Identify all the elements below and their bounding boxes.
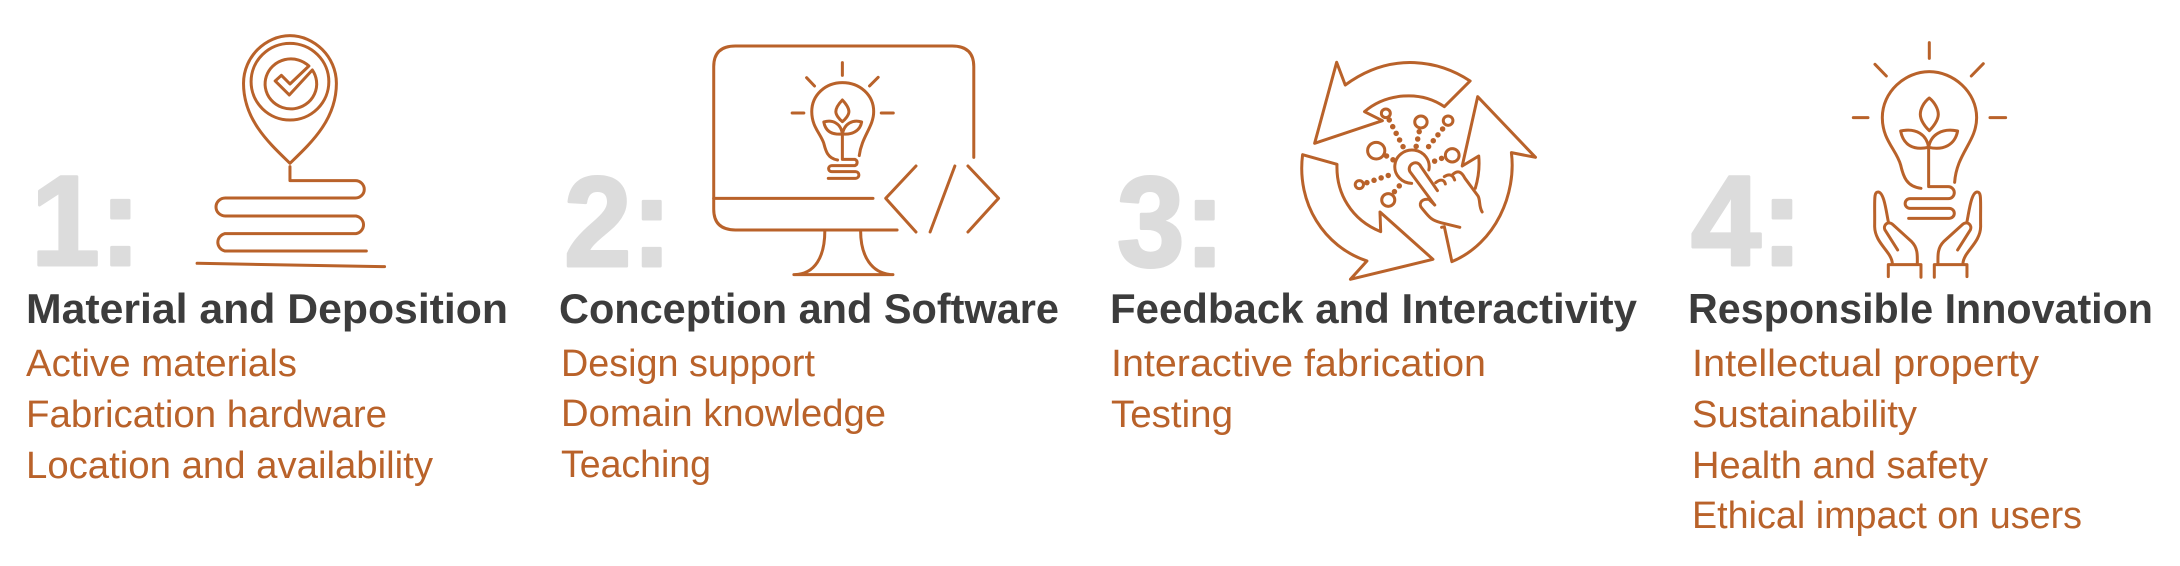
heading: Material and Deposition [26, 285, 508, 332]
heading: Feedback and Interactivity [1110, 285, 1638, 332]
number 3: 3: [1117, 151, 1225, 294]
panel: feedback and interactivity [1110, 62, 1638, 436]
list of topics: Teaching [561, 444, 711, 486]
list of topics: Intellectual property [1692, 343, 2039, 385]
list of topics [26, 343, 433, 487]
icon: circular arrows around touching hand [1302, 62, 1535, 279]
icon: location pin over deposited filament [197, 36, 385, 267]
list of topics: Sustainability [1692, 394, 1917, 436]
icon: hands holding light bulb with plant [1853, 43, 2006, 277]
list of topics: Interactive fabrication [1111, 343, 1486, 385]
icon: monitor with light bulb and code brackets [714, 46, 999, 275]
list of topics: Domain knowledge [561, 393, 886, 435]
number 1: 1: [31, 150, 141, 293]
list of topics [1692, 343, 2082, 537]
list of topics: Active materials [26, 343, 297, 385]
list of topics: Health and safety [1692, 445, 1988, 487]
list of topics: Ethical impact on users [1692, 495, 2082, 537]
number 4: 4: [1691, 150, 1803, 293]
list of topics: Fabrication hardware [26, 394, 387, 436]
heading: Responsible Innovation [1688, 285, 2153, 332]
list of topics: Testing [1111, 394, 1233, 436]
panel: responsible innovation [1688, 43, 2153, 537]
heading: Conception and Software [559, 285, 1059, 332]
list of topics: Design support [561, 343, 815, 385]
panel: material and deposition [26, 36, 508, 487]
panel: conception and software [559, 46, 1059, 486]
number 2: 2: [564, 151, 672, 294]
list of topics [561, 343, 886, 486]
list of topics [1111, 343, 1486, 436]
list of topics: Location and availability [26, 445, 433, 487]
